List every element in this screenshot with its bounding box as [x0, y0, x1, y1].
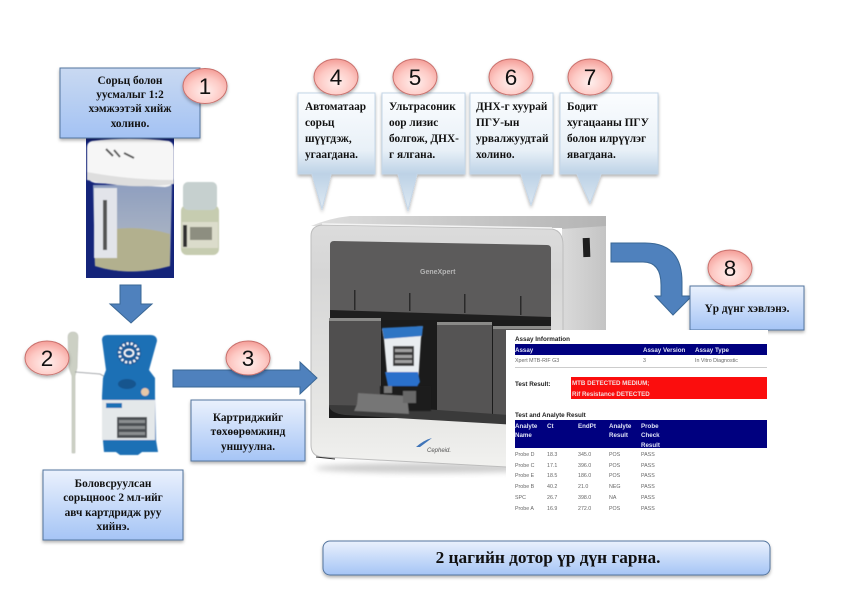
panel: printed result report: Assay Information	[515, 336, 570, 343]
analyte table: Probe C	[515, 463, 535, 469]
analyte table: Check	[641, 432, 660, 439]
test result banner	[571, 377, 767, 399]
panel: printed result report: In Vitro Diagnostic	[695, 358, 738, 364]
callout 4: automatic filtering and washing: шүүгдэж,	[305, 133, 352, 145]
arrow: instrument to printed result	[611, 243, 692, 315]
callout 1: sample and reagent mixing	[60, 68, 200, 138]
analyte table	[515, 420, 767, 512]
analyte table: Ct	[547, 423, 554, 430]
callout 6: DNA mixing with PCR reagents: ДНХ-г хуурай	[476, 101, 548, 113]
callout 8: print result	[690, 286, 804, 330]
analyte table: PASS	[641, 473, 655, 479]
analyte table: 26.7	[547, 495, 557, 501]
number badge 2: 2	[41, 346, 53, 371]
number badge 7	[568, 59, 612, 95]
callout 6: DNA mixing with PCR reagents: холино.	[476, 149, 515, 161]
number badge 8: 8	[724, 256, 736, 281]
callout 7: real-time PCR and detection	[560, 93, 658, 203]
analyte table: 40.2	[547, 484, 557, 490]
analyte table: 272.0	[578, 506, 591, 512]
analyte table: SPC	[515, 495, 526, 501]
callout 5: ultrasonic lysis	[382, 93, 465, 210]
analyte table: Name	[515, 432, 532, 439]
analyte table: POS	[609, 463, 621, 469]
number badge 1: 1	[199, 74, 211, 99]
analyte table: 21.0	[578, 484, 588, 490]
callout 4: automatic filtering and washing: угаагдана.	[305, 149, 358, 161]
callout 6: DNA mixing with PCR reagents: ПГУ-ын	[476, 117, 520, 129]
callout 7: real-time PCR and detection: явагдана.	[567, 149, 616, 161]
callout 1: sample and reagent mixing: Сорьц болон	[98, 75, 163, 87]
callout 4: automatic filtering and washing	[298, 93, 375, 209]
analyte table: Probe D	[515, 452, 535, 458]
callout 3: load the cartridge	[191, 400, 305, 461]
panel: printed result report: Xpert MTB-RIF G3	[515, 358, 559, 364]
panel: printed result report: 3	[643, 358, 646, 364]
analyte table: PASS	[641, 463, 655, 469]
test result banner: Rif Resistance DETECTED	[572, 391, 650, 398]
analyte table: Analyte	[609, 423, 632, 430]
number badge 5	[393, 59, 437, 95]
analyte table: PASS	[641, 452, 655, 458]
analyte table: Result	[609, 432, 628, 439]
analyte table: 396.0	[578, 463, 591, 469]
number badge 3: 3	[242, 346, 254, 371]
arrow: down to cartridge	[110, 285, 152, 323]
arrow: cartridge to instrument	[173, 362, 317, 394]
callout 5: ultrasonic lysis: Ультрасоник	[389, 101, 456, 113]
analyte table: 17.1	[547, 463, 557, 469]
analyte table: PASS	[641, 484, 655, 490]
callout 3: load the cartridge: уншуулна.	[221, 441, 275, 453]
panel: printed result report	[506, 330, 768, 520]
callout 5: ultrasonic lysis: болгож, ДНХ-	[389, 133, 459, 145]
callout 7: real-time PCR and detection: болон илрүүлэг	[567, 133, 646, 145]
callout 1: sample and reagent mixing: уусмалыг 1:2	[96, 89, 164, 101]
callout 6: DNA mixing with PCR reagents: урвалжуудтай	[476, 133, 549, 145]
analyte table: Probe	[641, 423, 659, 430]
number badge 2	[25, 341, 69, 375]
analyte table: PASS	[641, 495, 655, 501]
photo: GeneXpert instrument: GeneXpert	[420, 269, 456, 276]
number badge 4	[314, 59, 358, 95]
callout 5: ultrasonic lysis: г ялгана.	[389, 149, 435, 161]
number badge 7: 7	[584, 65, 596, 90]
analyte table: Probe A	[515, 506, 534, 512]
callout 2: processed sample into cartridge: хийнэ.	[97, 521, 130, 533]
callout 1: sample and reagent mixing: хэмжээтэй хийж	[89, 103, 172, 115]
panel: printed result report: Assay	[515, 347, 534, 354]
analyte table: 186.0	[578, 473, 591, 479]
analyte table: EndPt	[578, 423, 596, 430]
analyte table: POS	[609, 452, 621, 458]
photo: sample jar and reagent vial	[86, 138, 219, 278]
panel: printed result report: Assay Type	[695, 347, 729, 354]
callout 7: real-time PCR and detection: Бодит	[567, 101, 598, 113]
analyte table: 18.3	[547, 452, 557, 458]
banner: result within 2 hours: 2 цагийн дотор үр дүн гарна.	[436, 548, 660, 567]
callout 7: real-time PCR and detection: хугацааны ПГУ	[567, 117, 650, 129]
callout 4: automatic filtering and washing: Автоматаар	[305, 101, 366, 113]
panel: printed result report: Test and Analyte Result	[515, 412, 587, 419]
number badge 5: 5	[409, 65, 421, 90]
number badge 4: 4	[330, 65, 342, 90]
icon: transfer pipette	[68, 332, 125, 453]
number badge 3	[226, 341, 270, 375]
analyte table: Probe B	[515, 484, 535, 490]
photo: GeneXpert instrument	[311, 216, 606, 473]
callout 8: print result: Үр дүнг хэвлэнэ.	[705, 303, 790, 315]
callout 3: load the cartridge: төхөөрөмжинд	[211, 426, 286, 438]
analyte table: Result	[641, 442, 660, 449]
number badge 6	[489, 59, 533, 95]
callout 1: sample and reagent mixing: холино.	[111, 118, 149, 130]
banner: result within 2 hours	[323, 541, 770, 575]
test result banner: MTB DETECTED MEDIUM;	[572, 380, 649, 387]
panel: printed result report: Test Result:	[515, 381, 551, 388]
callout 2: processed sample into cartridge: авч картдридж руу	[65, 507, 162, 519]
analyte table: POS	[609, 473, 621, 479]
number badge 8	[708, 250, 752, 286]
analyte table: 16.9	[547, 506, 557, 512]
analyte table: NEG	[609, 484, 620, 490]
callout 2: processed sample into cartridge: сорьцноос 2 мл-ийг	[63, 492, 163, 504]
panel: printed result report: Assay Version	[643, 347, 686, 354]
callout 5: ultrasonic lysis: оор лизис	[389, 117, 438, 129]
callout 6: DNA mixing with PCR reagents	[470, 93, 553, 205]
number badge 6: 6	[505, 65, 517, 90]
analyte table: 18.5	[547, 473, 557, 479]
analyte table: Analyte	[515, 423, 538, 430]
analyte table: PASS	[641, 506, 655, 512]
photo: GeneXpert instrument: Cepheid.	[427, 448, 451, 454]
number badge 1	[183, 68, 227, 104]
analyte table: NA	[609, 495, 617, 501]
callout 2: processed sample into cartridge: Боловсруулсан	[75, 478, 152, 490]
photo: blue cartridge	[102, 335, 158, 455]
callout 2: processed sample into cartridge	[43, 470, 183, 540]
analyte table: Probe E	[515, 473, 535, 479]
analyte table: 345.0	[578, 452, 591, 458]
callout 3: load the cartridge: Картриджийг	[213, 412, 283, 424]
photo: cartridge inside instrument	[354, 326, 431, 414]
callout 4: automatic filtering and washing: сорьц	[305, 117, 335, 129]
analyte table: 398.0	[578, 495, 591, 501]
analyte table: POS	[609, 506, 621, 512]
